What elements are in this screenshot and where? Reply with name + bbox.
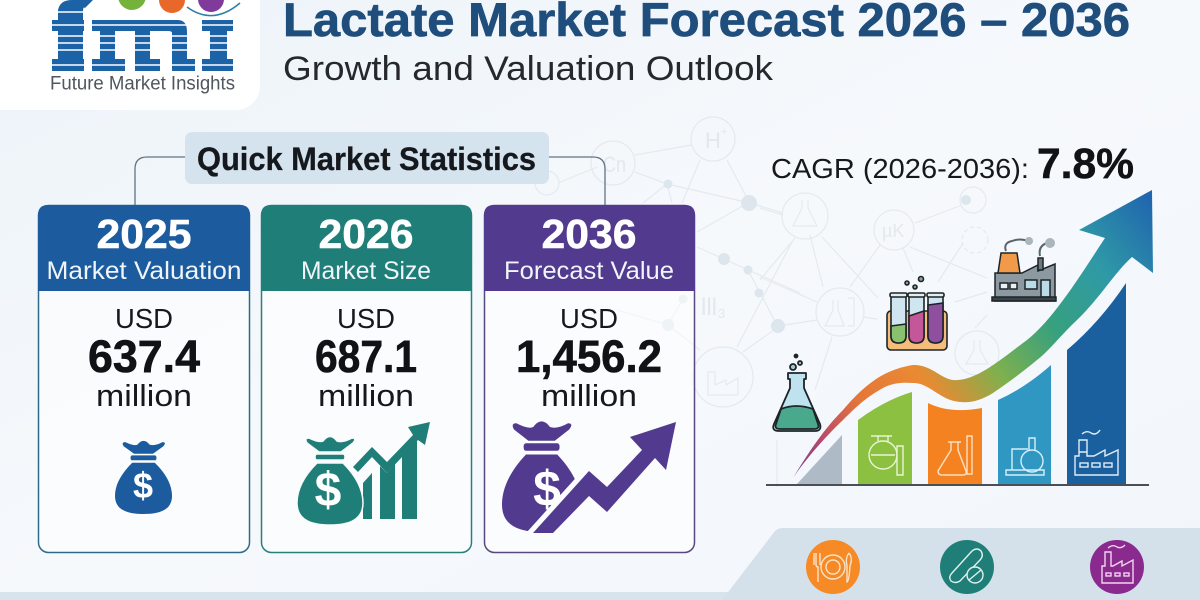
- growth arrow: [793, 190, 1153, 478]
- icon: money bag with growth chart: [297, 422, 430, 525]
- bar icon: factory: [1075, 430, 1118, 475]
- bar icon: distillation flask: [1006, 438, 1044, 475]
- bar chart: [766, 283, 1149, 486]
- network nodes: [662, 180, 971, 333]
- icon: lab flask: [773, 354, 820, 431]
- CAGR label: CAGR (2026-2036):: [771, 153, 1029, 184]
- bottom band: [0, 592, 1200, 600]
- network labels: Cn: [603, 152, 626, 177]
- panel: 2026 card: USD: [337, 303, 395, 334]
- molecular network background: [535, 117, 999, 487]
- panel: 2025 card: 2025: [96, 211, 192, 257]
- panel: 2025 card: million: [96, 378, 192, 413]
- bar icon: flask and tube: [938, 436, 972, 475]
- connector lines: [135, 157, 605, 206]
- network labels: [603, 126, 904, 321]
- panel: 2036 card: 1,456.2: [516, 331, 662, 382]
- bar icon: round flask: [869, 436, 903, 475]
- panel: 2036 card: USD: [560, 303, 618, 334]
- CAGR label: [771, 140, 1134, 188]
- network labels: lll: [701, 294, 717, 321]
- panel: 2026 card: 687.1: [315, 331, 417, 382]
- network labels: H: [705, 128, 721, 153]
- logo coloured dots: [118, 0, 240, 16]
- icon: money bag with growth chart: $: [315, 464, 342, 517]
- panel: 2026 card: million: [318, 378, 414, 413]
- chart baseline: [766, 484, 1149, 486]
- header logo panel: [0, 0, 260, 110]
- panel: 2036 card: 2036: [542, 211, 636, 257]
- icon: test tubes: [887, 276, 947, 350]
- panel: 2026 card: [261, 205, 472, 552]
- icon: purple factory: [1090, 540, 1144, 594]
- panel: 2026 card: 2026: [318, 211, 414, 257]
- panel: end-use sectors: [722, 528, 1200, 600]
- logo stripes: [52, 12, 233, 65]
- heading: quick market statistics: [185, 132, 549, 184]
- icon: money bag: $: [133, 465, 153, 506]
- panel: 2036 card: Forecast Value: [504, 257, 674, 285]
- icon: capsule and pill: [940, 540, 994, 594]
- panel: 2025 card: USD: [115, 303, 173, 334]
- panel: 2036 card: million: [541, 378, 637, 413]
- subtitle: Growth and Valuation Outlook: [283, 50, 774, 88]
- logo name: Future Market Insights: [50, 74, 235, 94]
- panel: 2025 card: Market Valuation: [46, 257, 242, 285]
- panel: 2036 card: [484, 205, 695, 552]
- network labels: 3: [718, 306, 725, 321]
- network labels: µK: [882, 221, 904, 241]
- panel: 2025 card: [38, 205, 250, 552]
- icon: money bag with rising arrow: [502, 421, 676, 533]
- heading: quick market statistics: Quick Market Statistics: [197, 141, 536, 177]
- icon: money bag with rising arrow: $: [533, 461, 561, 517]
- icon: factory: [992, 237, 1056, 301]
- CAGR label: 7.8%: [1037, 140, 1134, 188]
- icon: food plate: [806, 540, 860, 594]
- icon: money bag: [115, 441, 172, 514]
- logo: fmi lettering: [52, 0, 233, 71]
- network labels: +: [721, 126, 727, 138]
- panel: 2026 card: Market Size: [301, 257, 431, 285]
- panel: 2025 card: 637.4: [88, 331, 200, 382]
